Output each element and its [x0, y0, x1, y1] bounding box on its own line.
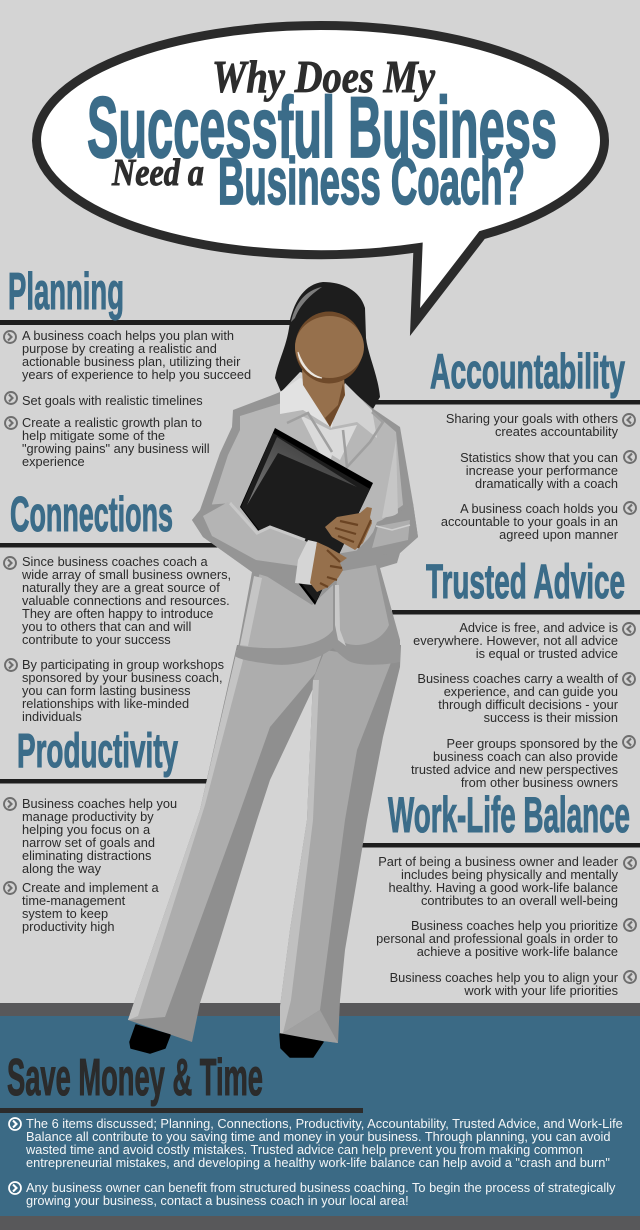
text: productivity 2: productivity high: [22, 919, 114, 934]
text: productivity 2: system to keep: [22, 906, 108, 921]
icon: chevron: [5, 392, 17, 404]
jacket light strips: [240, 576, 262, 646]
text: work-life 2: personal and professional goals in order to: [376, 931, 618, 946]
icon: chevron: [4, 882, 16, 894]
text: work-life 1: includes being physically and mentally: [401, 867, 619, 882]
text: connections 1: you to others that can and will: [22, 619, 191, 634]
text: work-life 1: Part of being a business owner and leader: [378, 854, 619, 869]
text: planning 1: years of experience to help you succeed: [22, 367, 251, 382]
right forearm: [355, 503, 418, 557]
band: bottom strip: [0, 1216, 640, 1230]
icon: chevron: [4, 331, 16, 343]
text: footer 1: The 6 items discussed; Planning, Connections, Productivity, Accountability, Trusted Advice, and Work-Life: [26, 1116, 623, 1131]
text: trusted 3: from other business owners: [461, 775, 618, 790]
text: connections 1: contribute to your success: [22, 632, 171, 647]
text: accountability 2: dramatically with a coach: [475, 476, 618, 491]
panel: work-life balance: [376, 787, 636, 998]
text: planning 3: Create a realistic growth plan to: [22, 415, 202, 430]
icon: chevron: [624, 502, 636, 514]
text: planning 1: actionable business plan, utilizing their: [22, 354, 241, 369]
panel: productivity: [4, 725, 178, 934]
jacket lower right: [336, 565, 389, 645]
text: footer 2: growing your business, contact a business coach in your local area!: [26, 1193, 409, 1208]
text: productivity 1: narrow set of goals and: [22, 835, 155, 850]
jacket chest: [210, 402, 403, 560]
text: trusted 1: is equal or trusted advice: [476, 646, 618, 661]
neck: [302, 370, 345, 427]
text: planning 2: Set goals with realistic timelines: [22, 393, 203, 408]
text: connections 1: They are often happy to introduce: [22, 606, 213, 621]
icon: chevron: [623, 623, 635, 635]
text: accountability 2: Statistics show that you can: [460, 450, 618, 465]
text: connections 1: naturally they are a great source of: [22, 580, 220, 595]
left cuff: [295, 540, 317, 585]
icon: chevron: [624, 971, 636, 983]
title: [87, 51, 557, 218]
panel: footer background: [0, 1016, 640, 1216]
text: footer 1: wasted time and avoid costly mistakes. Trusted advice can help prevent you from making common: [25, 1142, 583, 1157]
text: connections 2: sponsored by your business coach,: [22, 670, 223, 685]
icon: chevron: [623, 673, 635, 685]
text: accountability 3: accountable to your goals in an: [441, 514, 618, 529]
text: planning 1: purpose by creating a realistic and: [22, 341, 217, 356]
text: trusted 2: experience, and can guide you: [444, 684, 618, 699]
band: grey strip above footer: [0, 1003, 640, 1016]
jacket lower left: [240, 572, 333, 648]
text: planning 1: A business coach helps you plan with: [22, 328, 234, 343]
upper hand: [325, 507, 372, 550]
text: connections 1: valuable connections and resources.: [22, 593, 230, 608]
heading: connections: Connections: [10, 488, 173, 542]
jacket: [192, 385, 418, 665]
hair: [275, 282, 380, 409]
shirt and collar: [280, 378, 383, 470]
text: work-life 1: contributes to an overall well-being: [421, 893, 618, 908]
left hand: [310, 542, 347, 592]
panel: planning: [4, 263, 251, 469]
heading: save money and time: Save Money & Time: [7, 1049, 263, 1107]
text: accountability 1: creates accountability: [495, 424, 619, 439]
text: productivity 2: Create and implement a: [22, 880, 159, 895]
text: productivity 1: helping you focus on a: [22, 822, 151, 837]
pants: left leg: [128, 645, 340, 1042]
text: planning 3: "growing pains" any business will: [22, 441, 210, 456]
icon: chevron: [624, 451, 636, 463]
panel: connections: [4, 488, 231, 724]
text: footer 1: entrepreneurial mistakes, and developing a healthy work-life balance can help avoid a "crash and burn": [26, 1155, 610, 1170]
panel: save money and time: [0, 1049, 623, 1208]
speech bubble: [36, 26, 604, 322]
text: accountability 3: agreed upon manner: [499, 527, 619, 542]
title: Why Does My: [212, 51, 435, 102]
icon: chevron: [4, 557, 16, 569]
text: work-life 2: achieve a positive work-life balance: [417, 944, 618, 959]
text: planning 3: experience: [22, 454, 85, 469]
text: productivity 1: along the way: [22, 861, 102, 876]
text: connections 2: relationships with like-minded: [22, 696, 189, 711]
text: work-life 3: work with your life priorities: [463, 983, 618, 998]
text: work-life 2: Business coaches help you prioritize: [411, 918, 618, 933]
icon: chevron: [9, 1182, 21, 1194]
figure: businesswoman: [128, 282, 418, 1057]
text: connections 1: Since business coaches coach a: [22, 554, 209, 569]
text: trusted 3: Peer groups sponsored by the: [447, 736, 618, 751]
text: footer 2: Any business owner can benefit from structured business coaching. To begin the process of strategically: [26, 1180, 616, 1195]
text: productivity 1: eliminating distractions: [22, 848, 151, 863]
icon: chevron: [5, 659, 17, 671]
text: trusted 2: success is their mission: [484, 710, 618, 725]
text: connections 2: you can form lasting business: [22, 683, 191, 698]
left forearm: [192, 502, 313, 585]
text: productivity 1: manage productivity by: [22, 809, 154, 824]
panel: trusted advice: [411, 556, 635, 790]
panel: accountability: [430, 345, 636, 542]
divider lines: [0, 320, 640, 848]
text: trusted 2: Business coaches carry a wealth of: [417, 671, 618, 686]
pants: right leg: [280, 645, 401, 1043]
text: connections 2: By participating in group workshops: [22, 657, 224, 672]
shoes: [130, 1025, 323, 1057]
icon: chevron: [4, 798, 16, 810]
text: planning 3: help mitigate some of the: [22, 428, 165, 443]
text: connections 1: wide array of small business owners,: [21, 567, 231, 582]
text: trusted 3: business coach can also provide: [433, 749, 618, 764]
text: work-life 3: Business coaches help you to align your: [390, 970, 619, 985]
neck shadow: [325, 383, 345, 427]
text: trusted 1: Advice is free, and advice is: [459, 620, 618, 635]
icon: chevron: [624, 857, 636, 869]
title: Need a: [111, 152, 204, 194]
text: productivity 2: time-management: [22, 893, 126, 908]
text: productivity 1: Business coaches help you: [22, 796, 177, 811]
text: connections 2: individuals: [22, 709, 82, 724]
folder: [240, 428, 373, 605]
face: [295, 312, 364, 384]
text: trusted 2: through difficult decisions - your: [438, 697, 619, 712]
icon: chevron: [5, 417, 17, 429]
icon: chevron: [623, 414, 635, 426]
hair highlight: [291, 287, 322, 322]
icon: chevron: [623, 736, 635, 748]
text: footer 1: Balance all contribute to you saving time and money in your business. Through planning, you can avoid: [26, 1129, 611, 1144]
icon: chevron: [624, 919, 636, 931]
text: accountability 1: Sharing your goals with others: [446, 411, 618, 426]
text: accountability 3: A business coach holds you: [460, 501, 618, 516]
icon: chevron: [9, 1118, 21, 1130]
heading: planning: Planning: [8, 263, 124, 321]
text: work-life 1: healthy. Having a good work-life balance: [388, 880, 618, 895]
text: trusted 3: trusted advice and new perspectives: [411, 762, 618, 777]
heading: productivity: Productivity: [17, 725, 178, 778]
divider: [0, 1108, 363, 1113]
text: accountability 2: increase your performance: [466, 463, 618, 478]
text: trusted 1: everywhere. However, not all advice: [413, 633, 618, 648]
